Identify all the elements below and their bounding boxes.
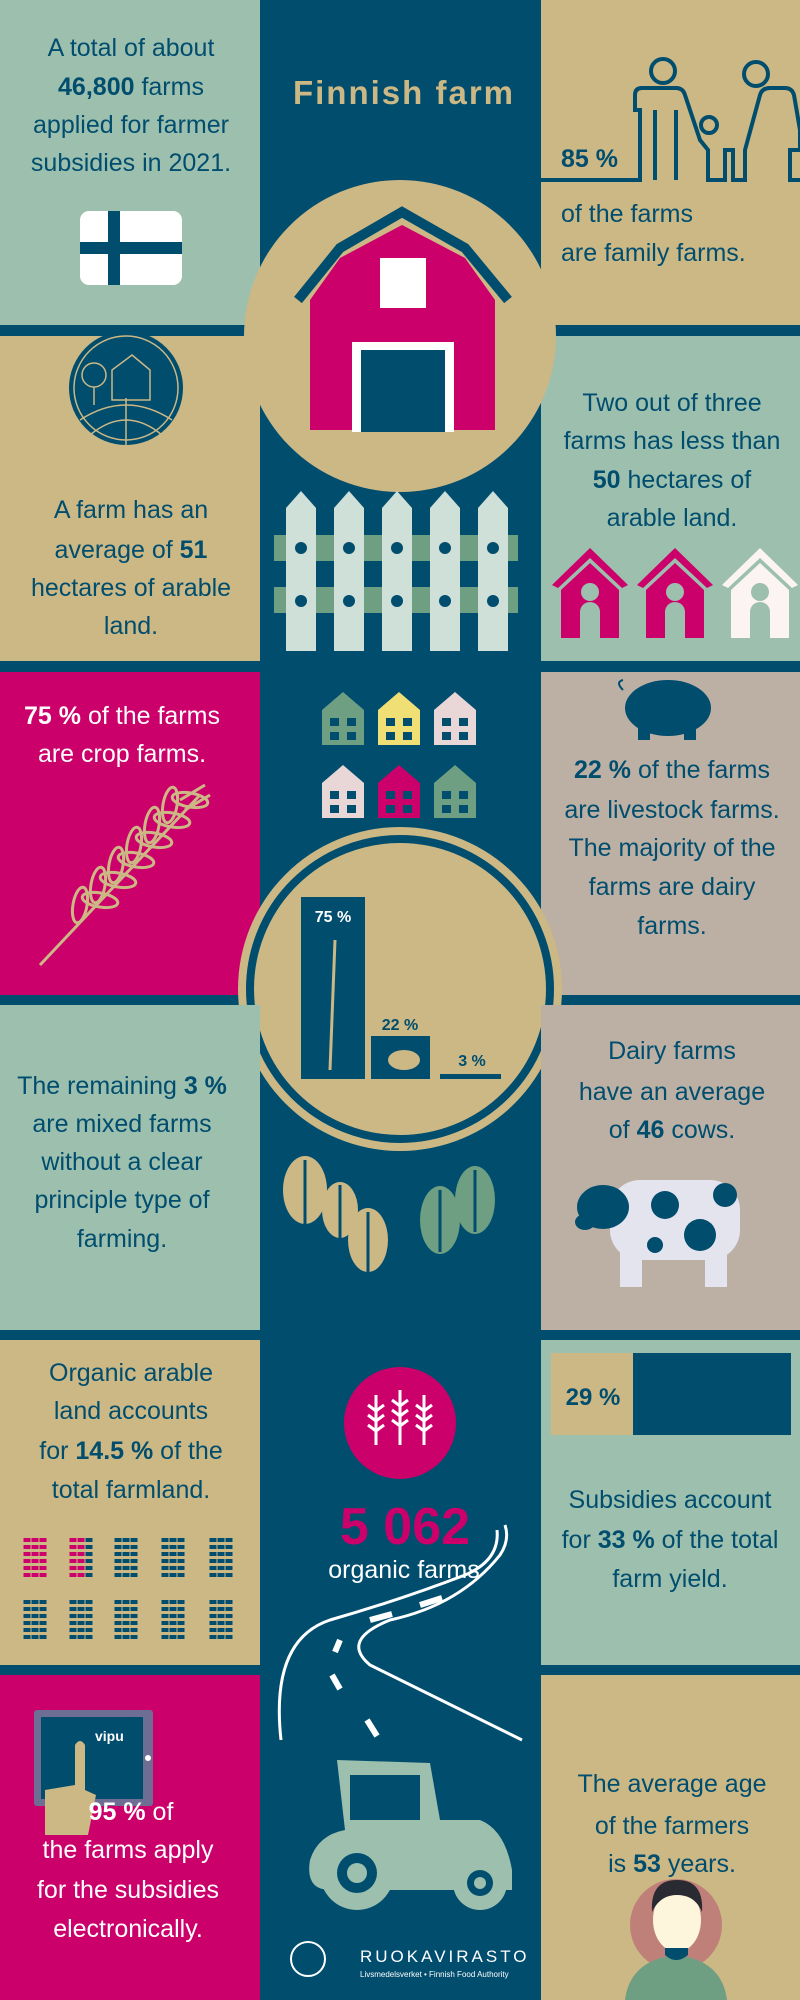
panel: organic land: total farmland.: [52, 1476, 210, 1504]
panel: farmer age: is 53 years.: [608, 1850, 736, 1878]
panel: total farms: applied for farmer: [33, 111, 229, 139]
panel: two out of three: farms has less than: [564, 427, 780, 455]
panel: two out of three: [541, 336, 800, 661]
panel: mixed farms: [0, 1005, 260, 1330]
panel: electronic applications: electronically.: [53, 1915, 203, 1943]
icon: tablet with hand: [34, 1710, 153, 1835]
icon: fence: [274, 491, 518, 651]
panel: family farms: of the farms: [561, 200, 693, 228]
icon: wheat: [40, 785, 210, 965]
panel: electronic applications: the farms apply: [43, 1836, 214, 1864]
panel: subsidies share: for 33 % of the total: [562, 1526, 778, 1554]
bar: 29%: 29 %: [566, 1384, 620, 1411]
panel: mixed farms: The remaining 3 %: [17, 1072, 227, 1100]
panel: total farms: [0, 0, 260, 325]
panel: electronic applications: [0, 1675, 260, 2000]
panel: two out of three: arable land.: [607, 504, 737, 532]
bar: 29%: [551, 1353, 791, 1435]
panel: subsidies share: farm yield.: [612, 1565, 728, 1593]
panel: organic land: land accounts: [54, 1397, 208, 1425]
panel: average hectares: [0, 331, 260, 661]
panel: dairy cows: Dairy farms: [608, 1037, 736, 1065]
panel: subsidies share: Subsidies account: [569, 1486, 772, 1514]
chart: farm types bar chart: [238, 827, 562, 1151]
logo: ruokavirasto: RUOKAVIRASTO: [360, 1947, 530, 1966]
icon: tractor: [309, 1760, 512, 1910]
panel: average hectares: hectares of arable: [31, 574, 231, 602]
panel: crop farms: 75 % of the farms: [24, 702, 220, 730]
text: organic farms count: organic farms: [328, 1556, 480, 1584]
panel: subsidies share: [541, 1340, 800, 1665]
panel: dairy cows: have an average: [579, 1078, 765, 1106]
icon: farm landscape circle: [69, 331, 183, 445]
panel: farmer age: The average age: [577, 1770, 767, 1798]
panel: dairy cows: of 46 cows.: [609, 1116, 735, 1144]
panel: mixed farms: are mixed farms: [32, 1110, 212, 1138]
icon: organic wheat circle: [344, 1367, 456, 1479]
panel: livestock farms: are livestock farms.: [564, 796, 780, 824]
panel: mixed farms: without a clear: [40, 1148, 203, 1176]
panel: total farms: A total of about: [48, 34, 214, 62]
icon: small houses: [322, 692, 476, 818]
icon: farmer avatar: [625, 1879, 727, 2000]
panel: family farms: are family farms.: [561, 239, 746, 267]
icon: cow: [575, 1180, 740, 1287]
icon: grain leaves: [283, 1156, 495, 1272]
panel: livestock farms: [541, 672, 800, 995]
panel: dairy cows: [541, 1005, 800, 1330]
panel: electronic applications: 95 % of: [89, 1798, 173, 1826]
panel: family farms: 85 %: [561, 145, 618, 173]
icon: tablet with hand: vipu: [95, 1728, 124, 1744]
panel: livestock farms: farms.: [637, 912, 707, 940]
logo: ruokavirasto: Livsmedelsverket • Finnish Food Authority: [360, 1970, 509, 1979]
icon: pig: [619, 680, 711, 740]
chart: farm types bar chart: 22 %: [382, 1017, 418, 1034]
panel: average hectares: A farm has an: [54, 496, 208, 524]
panel: family farms: [541, 0, 800, 325]
panel: organic land: [0, 1340, 260, 1665]
panel: total farms: subsidies in 2021.: [31, 149, 231, 177]
icon: barn in circle: [244, 180, 556, 492]
panel: average hectares: land.: [104, 612, 158, 640]
panel: organic land: for 14.5 % of the: [39, 1437, 223, 1465]
panel: total farms: 46,800 farms: [58, 73, 204, 101]
panel: livestock farms: The majority of the: [568, 834, 776, 862]
panel: farmer age: [541, 1675, 800, 2000]
icon: family: [541, 59, 800, 180]
panel: average hectares: average of 51: [55, 536, 208, 564]
panel: two out of three: 50 hectares of: [593, 466, 751, 494]
panel: organic land: Organic arable: [49, 1359, 213, 1387]
panel: electronic applications: for the subsidies: [37, 1876, 219, 1904]
icon: three houses: [552, 548, 798, 638]
panel: crop farms: are crop farms.: [38, 740, 206, 768]
panel: mixed farms: principle type of: [34, 1186, 210, 1214]
chart: farm types bar chart: 75 %: [315, 909, 351, 926]
icon: wheat grid: [27, 1538, 229, 1642]
chart: farm types bar chart: 3 %: [458, 1053, 486, 1070]
panel: livestock farms: 22 % of the farms: [574, 756, 770, 784]
icon: finnish flag: [80, 211, 182, 285]
panel: livestock farms: farms are dairy: [589, 873, 756, 901]
logo: ruokavirasto: [291, 1942, 530, 1979]
text: organic farms count: [328, 1498, 480, 1584]
title: Finnish farm: [293, 74, 515, 111]
text: organic farms count: 5 062: [340, 1498, 470, 1556]
panel: two out of three: Two out of three: [582, 389, 762, 417]
panel: mixed farms: farming.: [77, 1225, 167, 1253]
panel: crop farms: [0, 672, 260, 995]
panel: farmer age: of the farmers: [595, 1812, 749, 1840]
icon: road: [279, 1525, 522, 1740]
